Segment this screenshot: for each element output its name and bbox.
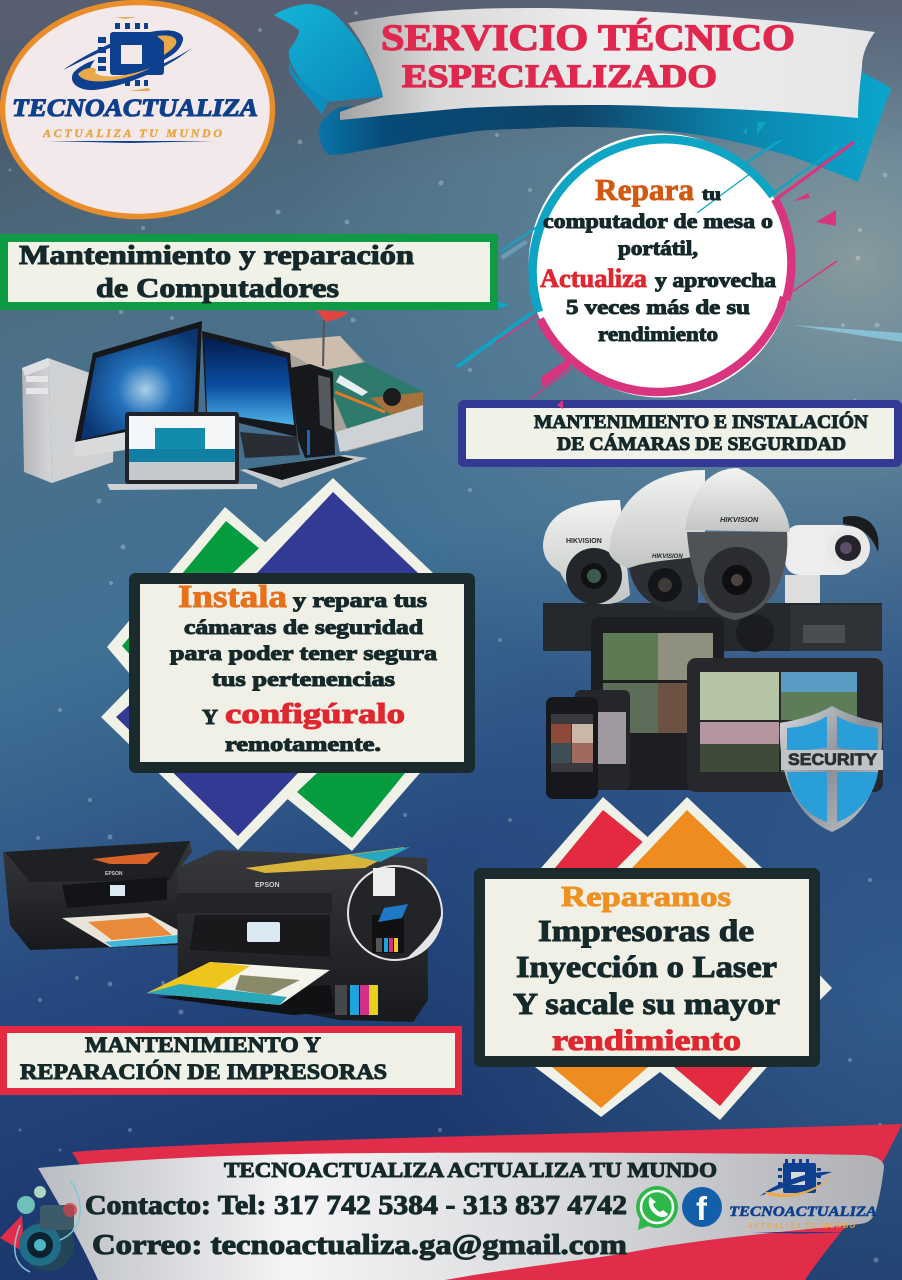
panel: cameras promo: Instala — [178, 578, 287, 614]
panel: printers promo: Reparamos — [561, 881, 731, 913]
icon: facebook — [682, 1187, 722, 1227]
panel: computers heading — [4, 238, 494, 306]
small logo: TECNOACTUALIZA — [729, 1204, 877, 1220]
footer banner red — [0, 1124, 902, 1280]
dome camera right: HIKVISION — [720, 515, 759, 524]
panel: cameras heading: MANTENIMIENTO E INSTALACIÓN — [534, 411, 868, 433]
circle text: Actualiza — [540, 264, 647, 293]
small printer: EPSON — [105, 871, 123, 877]
tagline: ACTUALIZA TU MUNDO — [42, 126, 222, 140]
ribbon banner: blue back and curl — [274, 4, 891, 182]
dome camera middle — [609, 470, 705, 611]
circle text: portátil, — [618, 236, 698, 260]
keyboard — [240, 455, 368, 488]
circle text: y aprovecha — [655, 270, 776, 292]
panel: printers promo: Impresoras de — [538, 913, 754, 948]
panel: printers promo: rendimiento — [552, 1024, 741, 1057]
panel: printers promo: Inyección o Laser — [516, 949, 777, 984]
panel: printers promo: Y sacale su mayor — [513, 986, 780, 1021]
laptop internals — [270, 336, 423, 452]
circle text: computador de mesa o — [543, 209, 773, 233]
panel: cameras promo: cámaras de seguridad — [184, 615, 423, 639]
title: ESPECIALIZADO — [402, 59, 717, 95]
brand name: TECNOACTUALIZA — [12, 95, 258, 122]
ribbon banner: white strip — [340, 8, 875, 120]
panel: cameras heading — [462, 400, 898, 463]
magnified ink tank — [348, 866, 442, 960]
circle text: rendimiento — [598, 322, 718, 346]
laptop — [107, 412, 257, 490]
panel: cameras heading: DE CÁMARAS DE SEGURIDAD — [557, 433, 846, 455]
panel: cameras promo: configúralo — [225, 698, 405, 730]
footer contact text: Correo: tecnoactualiza.ga@gmail.com — [92, 1230, 627, 1261]
footer contact text: TECNOACTUALIZA ACTUALIZA TU MUNDO — [224, 1158, 717, 1182]
icon: camera sketch — [15, 1180, 80, 1272]
circle text: Repara — [595, 172, 694, 207]
circle text — [540, 172, 776, 346]
footer banner white — [38, 1153, 884, 1280]
panel: cameras promo: Y — [202, 705, 218, 729]
panel: cameras promo — [134, 578, 470, 768]
security shield — [780, 706, 883, 832]
small printer — [3, 841, 192, 950]
phones — [546, 690, 630, 799]
footer contact text — [85, 1158, 717, 1261]
white circle with ring and accent lines — [455, 122, 854, 399]
tablet front — [687, 658, 883, 792]
diamonds: left group — [101, 478, 433, 851]
panel: computers heading: Mantenimiento y reparación — [19, 240, 414, 270]
panel: printers heading: REPARACIÓN DE IMPRESORAS — [20, 1059, 387, 1084]
icon: facebook: f — [696, 1190, 708, 1227]
title — [381, 17, 795, 95]
screwdriver — [316, 310, 348, 366]
circle text: tu — [702, 184, 721, 204]
panel: cameras promo: remotamente. — [225, 732, 381, 756]
dome camera left — [543, 500, 630, 604]
logo badge — [2, 2, 272, 216]
bullet camera — [785, 516, 879, 603]
icon: chip logo — [63, 17, 192, 91]
panel: cameras promo: para poder tener segura — [170, 641, 438, 665]
illustration: printers — [3, 841, 442, 1022]
panel: computers heading: de Computadores — [96, 273, 339, 303]
small logo — [729, 1159, 877, 1234]
second monitor — [202, 331, 300, 458]
diamonds: right group — [535, 797, 832, 1120]
iMac — [74, 321, 202, 457]
icon: whatsapp — [636, 1186, 678, 1230]
tower silver — [22, 358, 115, 483]
tablet back — [591, 617, 724, 790]
panel: cameras promo: tus pertenencias — [212, 667, 395, 691]
large printer — [147, 847, 428, 1022]
panel: printers heading — [4, 1030, 458, 1092]
footer contact text: Contacto: Tel: 317 742 5384 - 313 837 4742 — [85, 1190, 627, 1220]
illustration: security cameras — [543, 468, 883, 832]
dome camera right — [685, 468, 790, 620]
dome camera middle: HIKVISION — [652, 554, 683, 560]
large printer: EPSON — [255, 882, 280, 889]
illustration: computers — [22, 310, 423, 490]
nvr recorder — [543, 603, 882, 652]
tower black — [290, 364, 335, 458]
panel: printers heading: MANTENIMIENTO Y — [85, 1032, 321, 1057]
small logo: ACTUALIZA TU MUNDO — [747, 1222, 855, 1230]
dome camera left: HIKVISION — [566, 538, 602, 545]
panel: cameras promo: y repara tus — [293, 588, 427, 612]
circle text: 5 veces más de su — [566, 295, 750, 319]
panel: printers promo — [480, 874, 814, 1062]
title: SERVICIO TÉCNICO — [381, 17, 795, 59]
security shield: SECURITY — [788, 750, 878, 769]
